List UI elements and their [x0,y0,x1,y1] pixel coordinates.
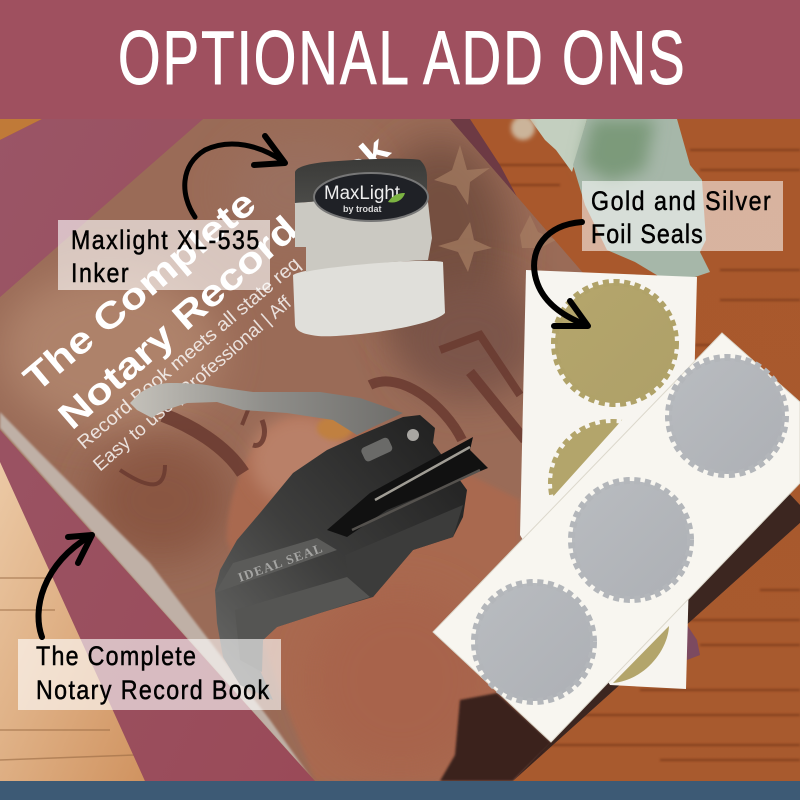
silver seal top [668,358,786,474]
label: foil seals [582,181,783,251]
book title [16,128,398,476]
book title: Easy to use | Professional | Aff [90,292,296,476]
label: record book [18,639,281,710]
maxlight stamp [293,159,445,336]
gold seal sheet [520,270,697,689]
book title: The Complete [16,182,264,399]
embosser brand strip [215,538,337,593]
label: foil seals: Foil Seals [591,219,703,249]
stamp grey body [295,193,432,272]
stamp logo oval [314,173,428,221]
eagle head and feathers [227,416,520,781]
label: record book: Notary Record Book [36,675,269,705]
gold seal large [554,282,676,404]
label: maxlight inker [58,220,270,290]
embosser slot [360,436,394,463]
maxlight stamp: by trodat [343,204,382,214]
cover stars [434,145,556,272]
label: maxlight inker: Inker [71,258,129,288]
embosser [130,383,488,700]
book title: Record Book meets all state req [74,253,305,454]
silver seal sheet [433,333,800,742]
stamp clear base [293,261,445,336]
label: record book: The Complete [36,641,196,671]
label: maxlight inker: Maxlight XL-535 [71,225,259,255]
gold seal middle [548,419,622,500]
dried flower [511,116,535,140]
maroon book cover [0,119,315,781]
book title: Notary Record Book [50,128,398,437]
silver seal middle [572,480,690,600]
footer bar [0,781,800,800]
book page edge [0,412,313,781]
stamp black cap [295,159,427,203]
leaf blade [573,119,710,277]
header bar [0,0,800,119]
embosser lower panel [235,577,370,672]
embosser brand label: IDEAL SEAL [236,540,325,585]
maroon book sliver [687,625,700,660]
embosser pivot [407,429,419,441]
cover dark arcs [120,335,525,484]
maroon book corner [450,119,540,240]
title: OPTIONAL ADD ONS [118,16,685,101]
embosser black body [215,415,467,700]
dark book strip [513,483,800,781]
leaf [530,119,710,277]
arrow: to record book [38,535,92,637]
embosser right panel [345,505,463,597]
arrow: to inker [185,136,285,217]
silver seal bottom [474,582,594,702]
embosser silver handle [130,383,403,435]
arrow: to foil seals [534,222,588,326]
label: foil seals: Gold and Silver [591,186,771,216]
stamp logo leaf [388,193,405,203]
embosser jaw [327,437,488,537]
gold seal lower [613,626,669,683]
stamp logo text: MaxLight [324,183,401,204]
leaf stem [530,119,587,172]
dark feather shadow [440,693,552,781]
